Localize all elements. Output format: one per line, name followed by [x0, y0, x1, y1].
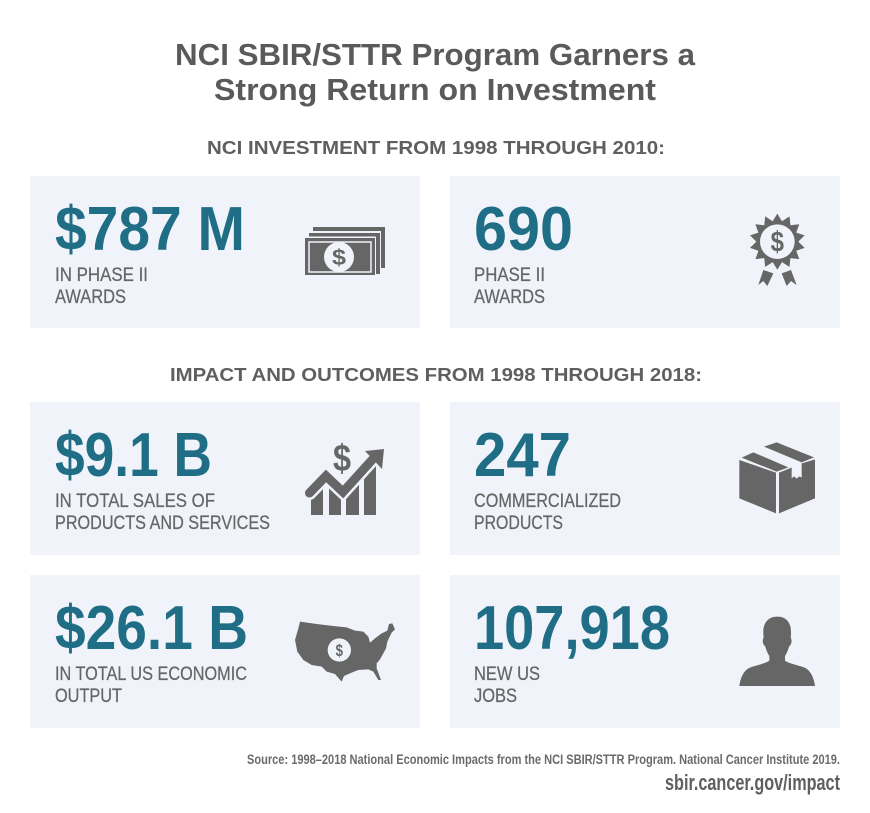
label: total sales: PRODUCTS AND SERVICES — [55, 513, 270, 534]
label: in phase II awards — [55, 265, 148, 308]
icon: person — [739, 617, 815, 686]
label: new US jobs: NEW US — [474, 664, 540, 685]
value: 247: 247 — [474, 421, 571, 490]
heading: investment: NCI INVESTMENT FROM 1998 THROUGH 2010: — [207, 138, 665, 158]
label: phase II awards — [474, 265, 545, 308]
label: phase II awards: AWARDS — [474, 287, 545, 308]
title: Strong Return on Investment — [214, 72, 656, 107]
icon: box — [739, 442, 815, 513]
panel: $9.1 B — [30, 402, 420, 555]
title: NCI SBIR/STTR Program Garners a — [175, 37, 696, 72]
label: commercialized products — [474, 491, 621, 534]
label: in phase II awards: AWARDS — [55, 287, 126, 308]
label: in phase II awards: IN PHASE II — [55, 265, 148, 286]
value: 690: 690 — [474, 195, 573, 264]
value: 107,918: 107,918 — [474, 594, 670, 663]
heading: impact: IMPACT AND OUTCOMES FROM 1998 THROUGH 2018: — [170, 365, 702, 385]
icon: money: $ — [332, 245, 346, 270]
title — [175, 37, 696, 107]
value: $787 M: $787 M — [55, 195, 245, 264]
label: economic output: IN TOTAL US ECONOMIC — [55, 664, 247, 685]
panel: $787 M — [30, 176, 420, 328]
icon: award rosette — [750, 214, 805, 286]
label: economic output: OUTPUT — [55, 686, 122, 707]
label: commercialized products: PRODUCTS — [474, 513, 563, 534]
icon: growth chart: $ — [333, 438, 351, 480]
icon: US map: $ — [336, 641, 344, 660]
icon: money — [305, 227, 385, 275]
label: total sales — [55, 491, 270, 534]
panel: $26.1 B — [30, 575, 420, 728]
icon: US map — [295, 622, 395, 682]
label: commercialized products: COMMERCIALIZED — [474, 491, 621, 512]
label: total sales: IN TOTAL SALES OF — [55, 491, 215, 512]
value: $9.1 B: $9.1 B — [55, 421, 212, 490]
value: $26.1 B: $26.1 B — [55, 594, 248, 663]
label: new US jobs: JOBS — [474, 686, 517, 707]
panel: 690 — [450, 176, 840, 328]
panel: 107,918 — [450, 575, 840, 728]
panel: 247 — [450, 402, 840, 555]
icon: award rosette: $ — [771, 227, 784, 259]
label: new US jobs — [474, 664, 540, 707]
label: phase II awards: PHASE II — [474, 265, 545, 286]
label: economic output — [55, 664, 247, 707]
icon: growth chart — [310, 438, 384, 515]
